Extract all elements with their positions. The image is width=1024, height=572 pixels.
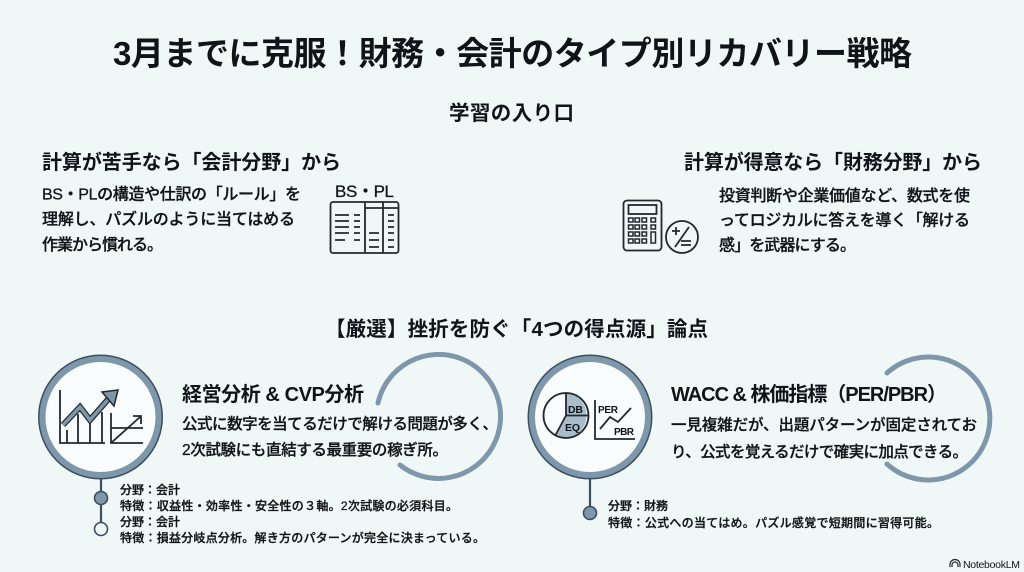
icon: pie and line chart in ring: PBR <box>614 427 635 438</box>
decorative arc: right <box>378 354 501 478</box>
text block: finance description: 投資判断や企業価値など、数式を使 <box>719 187 970 205</box>
heading: accounting: 計算が苦手なら「会計分野」から <box>42 150 341 174</box>
icon: pie and line chart in ring <box>532 359 648 475</box>
timeline <box>584 478 596 520</box>
text block: details <box>120 482 485 545</box>
text block: details: 分野：会計 <box>120 514 180 529</box>
text block: accounting description: 理解し、パズルのように当てはめる <box>42 210 295 228</box>
heading: WACC: WACC & 株価指標（PER/PBR） <box>671 383 947 406</box>
text block: finance description <box>719 187 970 254</box>
text block: details <box>608 498 939 530</box>
text block: description <box>671 415 977 461</box>
text block: description: り、公式を覚えるだけで確実に加点できる。 <box>671 443 968 461</box>
text block: description <box>182 414 498 459</box>
text block: finance description: 感」を武器にする。 <box>719 236 856 254</box>
text block: details: 特徴：収益性・効率性・安全性の３軸。2次試験の必須科目。 <box>120 498 458 513</box>
icon: growth chart in ring <box>42 359 158 475</box>
text block: details: 分野：財務 <box>608 498 668 513</box>
icon: math operators <box>666 221 698 253</box>
icon: pie and line chart in ring: PER <box>598 405 619 416</box>
text block: details: 特徴：損益分岐点分析。解き方のパターンが完全に決まっている。 <box>120 530 485 545</box>
text block: details: 分野：会計 <box>120 482 180 497</box>
text block: finance description: ってロジカルに答えを導く「解ける <box>719 210 970 230</box>
text block: accounting description: 作業から慣れる。 <box>42 236 163 254</box>
decorative arc: right <box>887 357 990 480</box>
timeline <box>94 478 108 536</box>
panel: finance entry <box>624 150 982 254</box>
text block: description: 一見複雑だが、出題パターンが固定されてお <box>671 415 977 434</box>
section heading: learning entry: 学習の入り口 <box>449 102 574 125</box>
text block: description: 公式に数字を当てるだけで解ける問題が多く、 <box>182 414 498 433</box>
panel: management analysis and CVP <box>42 354 501 545</box>
icon: calculator <box>624 200 662 250</box>
icon: balance sheet table: BS・PL <box>335 182 394 201</box>
logo: NotebookLM: NotebookLM <box>963 559 1020 571</box>
title: 3月までに克服！財務・会計のタイプ別リカバリー戦略 <box>113 35 912 72</box>
text block: description: 2次試験にも直結する最重要の稼ぎ所。 <box>182 441 448 459</box>
icon: pie and line chart in ring: EQ <box>565 422 580 434</box>
section heading: four scoring topics: 【厳選】挫折を防ぐ「4つの得点源」論点 <box>325 318 708 341</box>
text block: accounting description: BS・PLの構造や仕訳の「ルール」を <box>42 186 301 204</box>
panel: accounting entry <box>42 150 398 254</box>
heading: management analysis: 経営分析 & CVP分析 <box>182 383 364 406</box>
icon: balance sheet table <box>330 182 398 253</box>
text block: accounting description <box>42 186 301 254</box>
icon: pie and line chart in ring: DB <box>568 404 583 416</box>
heading: finance: 計算が得意なら「財務分野」から <box>684 150 982 174</box>
panel: WACC and stock indicators <box>532 357 990 530</box>
text block: details: 特徴：公式への当てはめ。パズル感覚で短期間に習得可能。 <box>608 515 939 530</box>
